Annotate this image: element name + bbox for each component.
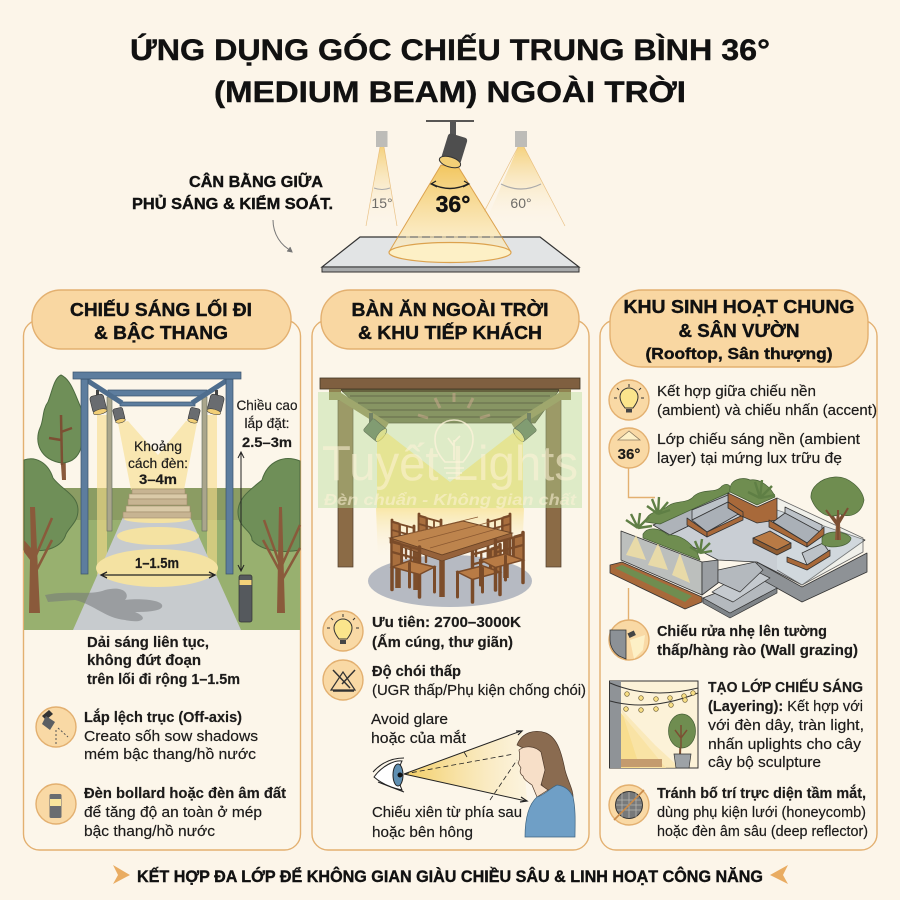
heading pill: & SÂN VƯỜN bbox=[678, 320, 800, 341]
text: avoid direct view: hoặc đèn âm sâu (deep reflector) bbox=[657, 824, 868, 840]
text: wall grazing bbox=[657, 624, 858, 659]
back posts and beams bbox=[85, 379, 229, 531]
lamp spacing label bbox=[128, 438, 188, 487]
panel frame bbox=[600, 320, 877, 850]
lamps bbox=[363, 413, 537, 443]
mounting height label bbox=[236, 397, 298, 571]
heading pill: KHU SINH HOẠT CHUNG bbox=[624, 296, 854, 317]
icon: warm bulb bbox=[323, 611, 363, 651]
icon: 36 degree badge bbox=[609, 428, 649, 468]
subtitle: balance of coverage and control: PHỦ SÁNG & KIỂM SOÁT. bbox=[132, 195, 333, 213]
lit surface bbox=[322, 237, 579, 272]
light below pergola bbox=[376, 508, 524, 560]
bollard bbox=[239, 575, 252, 622]
text: ambient layer: Lớp chiếu sáng nền (ambient bbox=[657, 432, 860, 448]
woman profile bbox=[517, 731, 575, 837]
title bbox=[130, 33, 770, 109]
panel: common area and garden bbox=[600, 290, 877, 850]
watermark panel: Đèn chuẩn - Không gian chất bbox=[324, 491, 577, 509]
path width label: 1–1.5m bbox=[135, 555, 179, 572]
stairs bbox=[123, 489, 191, 518]
text: ambient layer: layer) tại mứng lux trữu đẹ bbox=[657, 451, 842, 467]
36 degree medium beam with track light: 36° bbox=[436, 191, 470, 217]
60 degree wide beam: 60° bbox=[510, 195, 532, 211]
text: off-axis: Lắp lệch trục (Off-axis) bbox=[84, 708, 242, 726]
icon: wall grazing bbox=[609, 620, 649, 660]
text: ambient and accent: (ambient) và chiếu nhấn (accent) bbox=[657, 403, 877, 419]
lamp spacing label: Khoảng bbox=[134, 438, 182, 454]
light beams bbox=[97, 415, 217, 575]
pergola and dining illustration bbox=[318, 378, 582, 607]
back tree left bbox=[38, 375, 82, 480]
text: continuous light: không đứt đoạn bbox=[87, 653, 201, 669]
footer takeaway: KẾT HỢP ĐA LỚP ĐỂ KHÔNG GIAN GIÀU CHIỀU SÂU & LINH HOẠT CÔNG NĂNG bbox=[137, 867, 763, 886]
panel: outdoor dining bbox=[312, 290, 589, 850]
connector: terrace to wall grazing bbox=[628, 588, 630, 620]
text: ambient and accent: Kết hợp giữa chiếu nền bbox=[657, 384, 816, 400]
text: bollard: Đèn bollard hoặc đèn âm đất bbox=[84, 786, 286, 802]
lower planter bbox=[610, 562, 702, 609]
icon: bollard bbox=[36, 784, 76, 824]
front posts and top beam bbox=[73, 372, 241, 574]
text: continuous light: Dải sáng liên tục, bbox=[87, 635, 209, 651]
mounting height label: 2.5–3m bbox=[242, 434, 292, 450]
panel frame bbox=[24, 320, 300, 850]
text: avoid direct view: Tránh bố trí trực diện tầm mắt, bbox=[657, 784, 866, 802]
panel: pathway and stairs bbox=[24, 290, 300, 850]
text: avoid direct view: dùng phụ kiện lưới (honeycomb) bbox=[657, 805, 866, 821]
text: colour temperature bbox=[372, 615, 522, 651]
subtitle: balance of coverage and control bbox=[132, 173, 333, 213]
text: layering: với đèn dây, tràn light, bbox=[708, 718, 864, 734]
layering illustration bbox=[610, 681, 698, 768]
icon: 36 degree badge: 36° bbox=[618, 446, 640, 463]
text: side lighting: hoặc bên hông bbox=[372, 825, 473, 841]
icon: off-axis light bbox=[36, 707, 76, 747]
eye sight-line diagram bbox=[373, 731, 575, 837]
back hedge bbox=[645, 484, 731, 524]
heading pill: & BẬC THANG bbox=[94, 322, 228, 343]
60 degree wide beam bbox=[484, 131, 565, 226]
mounting height label: lắp đặt: bbox=[244, 415, 290, 431]
front tree right bbox=[238, 459, 300, 613]
coffee table bbox=[753, 531, 791, 555]
text: layering: cây bộ sculpture bbox=[708, 755, 821, 771]
spiky plant on wall bbox=[690, 539, 712, 553]
heading pill: (Rooftop, Sân thượng) bbox=[646, 346, 832, 363]
heading pill: BÀN ĂN NGOÀI TRỜI bbox=[352, 299, 548, 320]
text: layering: (Layering): Kết hợp với bbox=[708, 699, 863, 715]
text: side lighting bbox=[372, 805, 522, 841]
rug bbox=[368, 555, 532, 607]
text: layering bbox=[708, 678, 864, 771]
text: avoid glare: Avoid glare bbox=[371, 712, 448, 728]
text: continuous light: trên lối đi rộng 1–1.5m bbox=[87, 672, 240, 688]
planter box with shrubs bbox=[728, 478, 777, 523]
text: avoid direct view bbox=[657, 784, 868, 840]
arrow: subtitle to surface bbox=[273, 220, 292, 252]
15 degree narrow beam: 15° bbox=[371, 195, 393, 211]
text: ambient layer bbox=[657, 432, 860, 467]
tree bbox=[811, 477, 864, 547]
text: colour temperature: Ưu tiên: 2700–3000K bbox=[372, 615, 522, 631]
text: continuous light bbox=[87, 635, 240, 688]
panel frame bbox=[312, 320, 589, 850]
front tree left bbox=[24, 459, 78, 613]
36 degree medium beam with track light bbox=[389, 121, 511, 262]
text: low glare: (UGR thấp/Phụ kiện chống chói) bbox=[372, 683, 586, 699]
heading pill: & KHU TIẾP KHÁCH bbox=[358, 322, 542, 343]
icon: low glare bbox=[323, 660, 363, 700]
stairs bbox=[703, 562, 777, 618]
dining table and chairs bbox=[390, 514, 523, 602]
title: ỨNG DỤNG GÓC CHIẾU TRUNG BÌNH 36° bbox=[130, 33, 770, 67]
watermark panel bbox=[318, 392, 582, 509]
text: off-axis: Creato sốh sow shadows bbox=[84, 729, 258, 745]
connector: badge to terrace bbox=[628, 468, 655, 498]
text: avoid glare: hoặc của mắt bbox=[371, 730, 466, 747]
sight cone bbox=[404, 731, 527, 802]
beam angle diagram bbox=[322, 121, 579, 272]
base and floor bbox=[653, 493, 867, 602]
icon: ambient bulb bbox=[609, 380, 649, 420]
text: layering: nhấn uplights cho cây bbox=[708, 737, 862, 753]
text: bollard: để tăng độ an toàn ở mép bbox=[84, 805, 262, 821]
icon: honeycomb bbox=[609, 785, 649, 825]
icon: eye bbox=[373, 758, 404, 792]
text: layering: TẠO LỚP CHIẾU SÁNG bbox=[708, 678, 863, 696]
pergola bbox=[320, 378, 580, 567]
heading pill: CHIẾU SÁNG LỐI ĐI bbox=[70, 299, 252, 320]
text: low glare bbox=[372, 664, 586, 699]
heading pill bbox=[32, 290, 291, 349]
text: avoid glare bbox=[371, 712, 466, 747]
path with light pools bbox=[45, 515, 241, 630]
watermark panel: Tuyết Lights bbox=[322, 437, 578, 491]
text: colour temperature: (Ấm cúng, thư giãn) bbox=[372, 634, 513, 651]
text: side lighting: Chiếu xiên từ phía sau bbox=[372, 805, 522, 821]
lamp spacing label: 3–4m bbox=[139, 471, 177, 487]
front wall with wash lights bbox=[621, 531, 718, 595]
spiky plants bbox=[626, 480, 775, 528]
text: wall grazing: thấp/hàng rào (Wall grazing) bbox=[657, 643, 858, 659]
armchair bbox=[787, 543, 830, 570]
arrow left bbox=[113, 865, 130, 884]
text: ambient and accent bbox=[657, 384, 877, 419]
text: off-axis: mém bậc thang/hồ nước bbox=[84, 747, 256, 763]
pathway illustration bbox=[24, 372, 300, 630]
text: bollard: bậc thang/hồ nước bbox=[84, 824, 215, 840]
heading pill bbox=[321, 290, 579, 349]
mounting height label: Chiều cao bbox=[236, 397, 298, 413]
rooftop terrace illustration bbox=[610, 477, 867, 618]
sofa one bbox=[687, 495, 743, 537]
subtitle: balance of coverage and control: CÂN BẰNG GIỮA bbox=[189, 173, 323, 191]
text: bollard bbox=[84, 786, 286, 840]
title: (MEDIUM BEAM) NGOÀI TRỜI bbox=[214, 75, 686, 109]
heading pill bbox=[610, 290, 868, 367]
arrow right bbox=[770, 865, 788, 884]
15 degree narrow beam bbox=[366, 131, 397, 226]
lamp spacing label: cách đèn: bbox=[128, 455, 188, 471]
sofa two bbox=[769, 507, 824, 547]
text: low glare: Độ chói thấp bbox=[372, 664, 461, 680]
text: wall grazing: Chiếu rửa nhẹ lên tường bbox=[657, 624, 827, 640]
path width label bbox=[101, 555, 215, 578]
text: off-axis bbox=[84, 708, 258, 763]
watermark bulb bbox=[435, 420, 473, 478]
front hedge bbox=[643, 529, 700, 560]
spotlights bbox=[89, 390, 225, 424]
